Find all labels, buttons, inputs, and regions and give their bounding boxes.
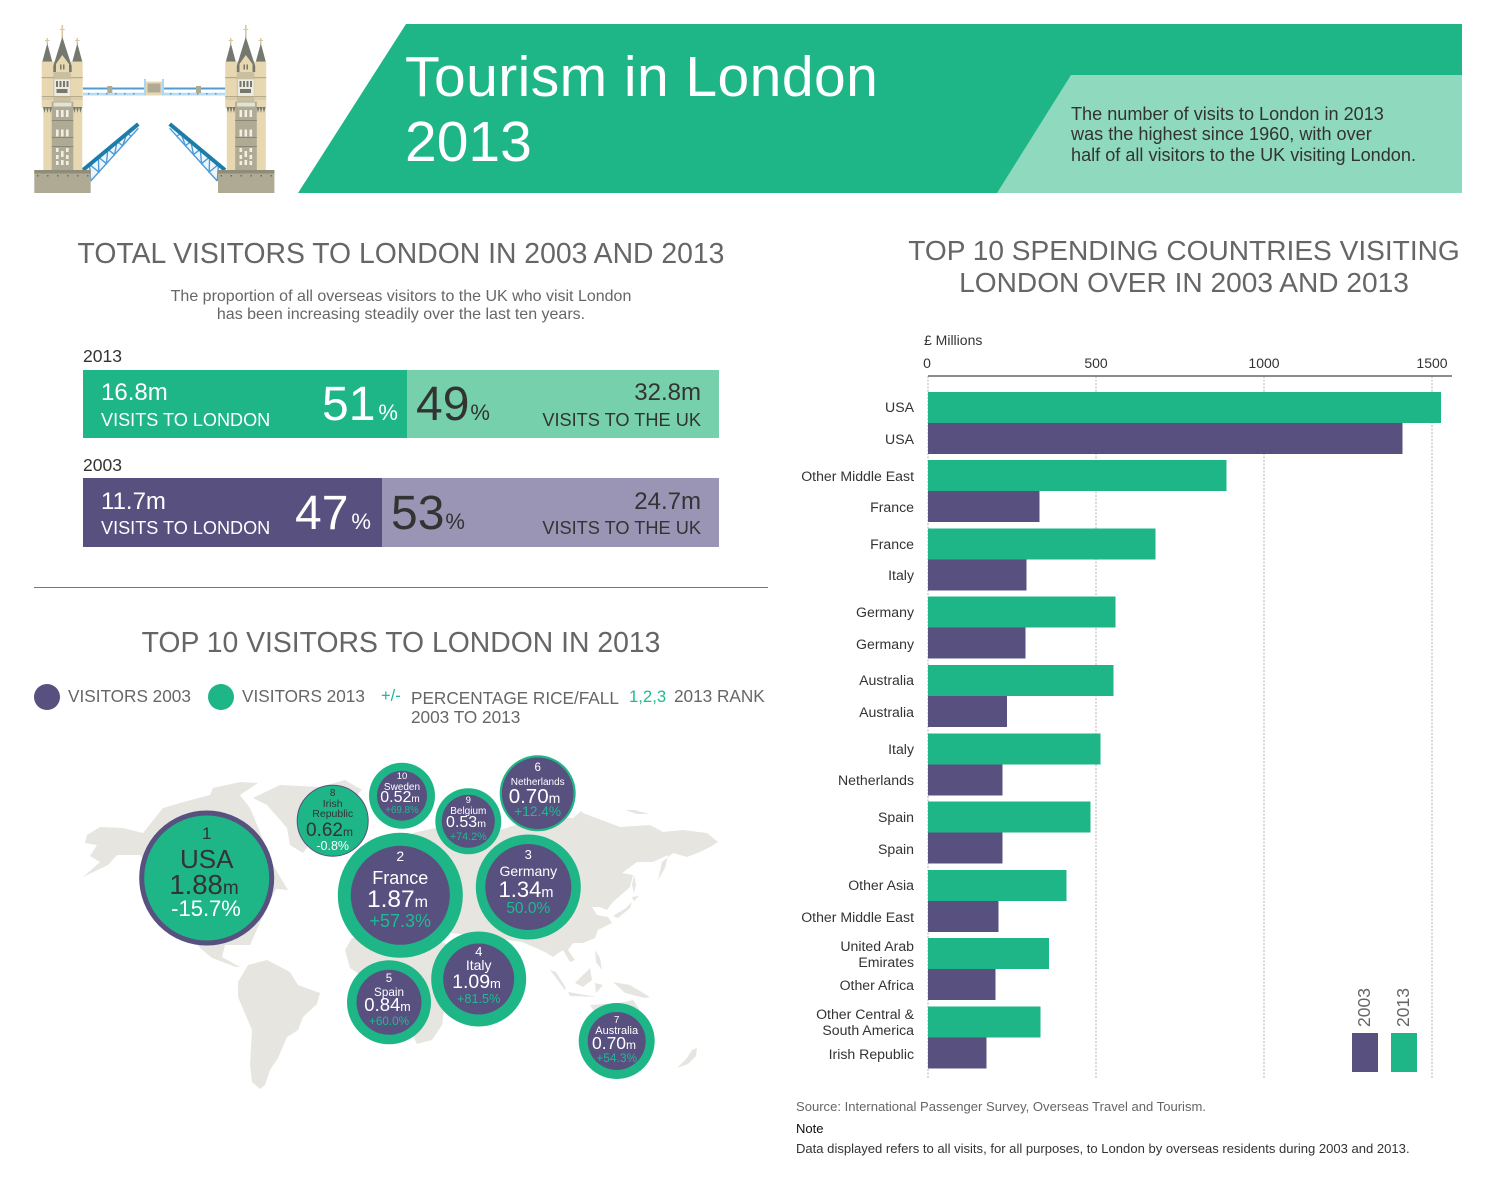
axis tick labels: 1500 <box>1416 355 1448 371</box>
panel: 2003 proportion bar: 53% <box>391 487 465 540</box>
category labels: USA <box>885 431 915 447</box>
bubble: USA rank 1: 1 <box>202 824 211 843</box>
axis tick labels: 0 <box>923 355 931 371</box>
category labels: Australia <box>859 704 914 720</box>
category labels: Spain <box>878 809 914 825</box>
bubble: Sweden rank 10 <box>369 763 435 829</box>
2003 bars <box>928 423 1402 1068</box>
icon: Tower Bridge illustration <box>34 25 274 193</box>
title: 2013 <box>405 110 532 174</box>
category labels: Emirates <box>858 954 914 970</box>
panel: 2013 proportion bar: 2013 <box>83 346 122 366</box>
legend: map: VISITORS 2013 <box>242 686 365 706</box>
intro text: The number of visits to London in 2013 <box>1071 104 1384 124</box>
bubble: Spain rank 5: 0.84m <box>364 994 411 1015</box>
axis tick labels: 500 <box>1084 355 1108 371</box>
category labels: United Arab <box>840 938 914 954</box>
intro text: was the highest since 1960, with over <box>1070 124 1372 144</box>
panel: 2013 proportion bar: 16.8m <box>101 379 168 406</box>
bubble: Netherlands rank 6: 0.70m <box>509 785 560 808</box>
bubble: Italy rank 4: 4 <box>475 944 482 959</box>
bubble: Germany rank 3: 1.34m <box>499 877 553 902</box>
bubble: France rank 2: France <box>372 868 428 888</box>
bubble: Germany rank 3: 3 <box>525 847 532 862</box>
bubble: Italy rank 4: +81.5% <box>457 992 500 1006</box>
panel: 2013 proportion bar: VISITS TO THE UK <box>542 410 701 430</box>
bubble: Netherlands rank 6: 6 <box>534 762 541 774</box>
chart legend <box>1352 988 1417 1072</box>
bubble: Australia rank 7: 7 <box>614 1015 620 1026</box>
left tower <box>34 25 91 193</box>
header banner <box>298 24 1462 193</box>
bubble: Germany rank 3 <box>476 834 581 940</box>
bubble: Belgium rank 9: 0.53m <box>446 814 486 831</box>
Greenland and Baffin <box>253 780 362 853</box>
bubble: Netherlands rank 6: +12.4% <box>514 804 561 819</box>
bubble: Belgium rank 9: +74.2% <box>450 831 487 843</box>
bubble: Australia rank 7: +54.3% <box>596 1051 637 1065</box>
bubble: Sweden rank 10: Sweden <box>384 782 420 793</box>
bubble: Irish Republic rank 8: Irish <box>323 798 343 810</box>
category labels: Germany <box>856 604 915 620</box>
bubble: Spain rank 5: 5 <box>386 973 392 985</box>
legend: map <box>34 684 765 727</box>
heading: top 10 spending countries: LONDON OVER IN 2003 AND 2013 <box>959 267 1409 298</box>
bubble: France rank 2: +57.3% <box>370 911 431 931</box>
bubble: Netherlands rank 6 <box>500 755 576 831</box>
panel: 2013 proportion bar <box>83 346 719 438</box>
bubble: USA rank 1: USA <box>180 844 234 874</box>
world map <box>83 780 718 1089</box>
category labels: Other Asia <box>848 877 914 893</box>
bridge right bascule <box>170 124 225 181</box>
panel: 2013 proportion bar: 51% <box>322 378 398 431</box>
bubble: Irish Republic rank 8: -0.8% <box>316 839 349 853</box>
bubble: Italy rank 4: Italy <box>466 957 492 973</box>
bubble: France rank 2: 2 <box>396 848 404 864</box>
panel: 2003 proportion bar: 11.7m <box>101 488 166 515</box>
category labels: Spain <box>878 841 914 857</box>
heading: top 10 spending countries: TOP 10 SPENDING COUNTRIES VISITING <box>908 235 1460 266</box>
bubble: Italy rank 4: 1.09m <box>452 971 501 993</box>
bubble: Australia rank 7 <box>579 1003 655 1079</box>
bubble: Spain rank 5: +60.0% <box>369 1015 409 1028</box>
bubble: USA rank 1 <box>142 813 272 943</box>
subheading: proportion text: The proportion of all overseas visitors to the UK who visit London <box>171 288 631 305</box>
panel: 2013 proportion bar: 32.8m <box>634 379 701 406</box>
source and note: Data displayed refers to all visits, for all purposes, to London by overseas residents during 2003 and 2013. <box>796 1141 1410 1156</box>
Southeast Asian islands <box>550 950 650 998</box>
heading: total visitors: TOTAL VISITORS TO LONDON IN 2003 AND 2013 <box>78 238 724 270</box>
panel: 2003 proportion bar: 47% <box>295 487 371 540</box>
chart legend: 2013 <box>1393 988 1413 1027</box>
axis title: £ Millions <box>924 332 982 348</box>
panel: 2013 proportion bar: VISITS TO LONDON <box>101 410 270 430</box>
legend: map: PERCENTAGE RICE/FALL <box>411 688 619 708</box>
bubble: Sweden rank 10: 0.52m <box>380 789 420 806</box>
bubble: Italy rank 4 <box>431 932 526 1026</box>
panel: 2003 proportion bar: VISITS TO LONDON <box>101 518 270 538</box>
2013 bars <box>928 392 1441 1038</box>
bubble: Australia rank 7: Australia <box>595 1025 639 1037</box>
bubble: Spain rank 5: Spain <box>374 986 404 999</box>
bubble: USA rank 1: -15.7% <box>171 896 241 921</box>
category labels: Germany <box>856 636 915 652</box>
bubble: Spain rank 5 <box>347 960 431 1044</box>
bubble: USA rank 1: 1.88m <box>169 869 239 900</box>
panel: 2003 proportion bar: 24.7m <box>634 488 701 515</box>
title: Tourism in London <box>405 45 878 109</box>
legend: map: 1,2,3 <box>629 687 666 706</box>
bridge walkway <box>83 79 225 96</box>
bubble: Belgium rank 9: Belgium <box>450 806 486 817</box>
bubble: Belgium rank 9 <box>435 788 501 854</box>
bubble: Sweden rank 10: 10 <box>397 771 407 782</box>
category labels: South America <box>822 1022 914 1038</box>
panel: 2003 proportion bar: 2003 <box>83 455 122 475</box>
category labels: Irish Republic <box>829 1046 914 1062</box>
category labels: Other Africa <box>840 977 914 993</box>
bubble: Netherlands rank 6: Netherlands <box>511 777 565 788</box>
category labels: Italy <box>888 567 915 583</box>
bubble: Irish Republic rank 8 <box>297 785 368 856</box>
Eurasia <box>390 811 718 962</box>
New Zealand <box>677 1048 697 1068</box>
bubble: Sweden rank 10: +69.8% <box>385 805 419 816</box>
Africa <box>345 930 470 1044</box>
panel: 2003 proportion bar <box>83 455 719 547</box>
source and note: Source: International Passenger Survey, Overseas Travel and Tourism. <box>796 1099 1206 1114</box>
banner background <box>298 24 1462 193</box>
category labels: Other Middle East <box>801 468 914 484</box>
category labels: Other Middle East <box>801 909 914 925</box>
bubble: Belgium rank 9: 9 <box>466 795 471 806</box>
bubble: Irish Republic rank 8: 0.62m <box>306 820 353 841</box>
source and note: Note <box>796 1121 824 1136</box>
subheading: proportion text: has been increasing steadily over the last ten years. <box>217 306 585 323</box>
category labels: France <box>870 499 914 515</box>
bridge left bascule <box>83 124 138 181</box>
panel: 2003 proportion bar: VISITS TO THE UK <box>542 518 701 538</box>
panel: 2013 proportion bar: 49% <box>416 378 490 431</box>
legend: map: +/- <box>381 687 401 705</box>
North America <box>83 782 288 967</box>
bubble: France rank 2 <box>338 833 463 958</box>
banner callout panel <box>997 75 1462 193</box>
Sakhalin and Japan <box>613 875 639 918</box>
category labels: Italy <box>888 741 915 757</box>
bubble: Australia rank 7: 0.70m <box>592 1033 636 1053</box>
legend: map: 2013 RANK <box>674 686 765 706</box>
intro text: half of all visitors to the UK visiting London. <box>1071 145 1416 165</box>
bubble: Irish Republic rank 8: Republic <box>312 808 353 820</box>
bubble: Irish Republic rank 8: 8 <box>330 788 336 799</box>
category labels: Netherlands <box>838 772 914 788</box>
bubble: Germany rank 3: Germany <box>500 863 557 879</box>
South America <box>238 960 320 1089</box>
category labels: Australia <box>859 672 914 688</box>
heading: top 10 visitors: TOP 10 VISITORS TO LONDON IN 2013 <box>142 627 660 659</box>
category labels <box>801 399 915 1062</box>
Northern Australia <box>590 1000 640 1020</box>
category labels: USA <box>885 399 915 415</box>
bar chart: spending by country <box>801 332 1452 1078</box>
axis tick labels: 1000 <box>1248 355 1280 371</box>
legend: map: VISITORS 2003 <box>68 686 191 706</box>
axis tick labels <box>923 355 1448 371</box>
category labels: France <box>870 536 914 552</box>
bubble: Germany rank 3: 50.0% <box>506 900 550 917</box>
right tower <box>218 25 274 193</box>
chart legend: 2003 <box>1354 988 1374 1027</box>
Arctic islands <box>625 810 649 814</box>
legend: map: 2003 TO 2013 <box>411 707 520 727</box>
bubble: France rank 2: 1.87m <box>367 886 428 913</box>
source and note <box>796 1099 1410 1156</box>
category labels: Other Central & <box>816 1006 915 1022</box>
